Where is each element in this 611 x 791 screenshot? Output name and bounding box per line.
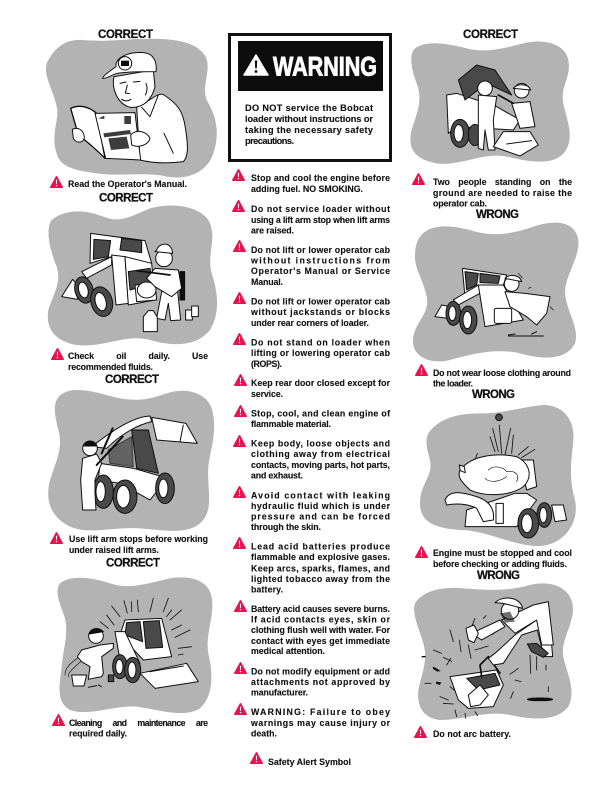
item: operator cab instructions: without instructions from (250, 256, 390, 266)
caption (69, 718, 208, 738)
caption: under raised lift arms. (69, 545, 159, 555)
item: battery acid: If acid contacts eyes, skin or (251, 614, 391, 624)
caption: operator cab. (433, 198, 487, 208)
illustration: overheated engine explosion (420, 405, 576, 546)
caption (433, 548, 572, 569)
icon: safety alert (51, 533, 62, 543)
caption: the loader. (433, 378, 473, 388)
warning text: DO NOT service the Bobcat (245, 103, 373, 113)
item: failure to obey (235, 704, 391, 738)
illustration: man checking oil in loader (48, 205, 217, 345)
item: jackstands: without jackstands or blocks (250, 307, 390, 317)
warning text: loader without instructions or (245, 114, 373, 124)
item: lead acid batteries: battery. (251, 584, 283, 594)
item: stop and cool: adding fuel. NO SMOKING. (251, 184, 363, 194)
item: flammable material (235, 406, 390, 429)
caption (68, 351, 208, 372)
item: rear door: service. (251, 389, 283, 399)
item: lead acid batteries: flammable and explosive gases. (251, 552, 390, 562)
panel: do not arc battery (414, 570, 573, 739)
heading: wrong: WRONG (477, 570, 520, 582)
item: battery acid: medical attention. (251, 646, 325, 656)
panel: lift arm stops (48, 374, 214, 555)
caption: Two people standing on the (433, 177, 572, 187)
heading: correct: CORRECT (99, 192, 153, 204)
item: jackstands: under rear corners of loader. (251, 318, 369, 328)
item: rear door (235, 375, 391, 399)
illustration: two people raising the cab (410, 41, 570, 164)
item: battery acid: Battery acid causes severe burns. (251, 604, 390, 614)
caption (433, 368, 571, 388)
safety list (233, 170, 391, 767)
caption: before checking or adding fluids. (433, 559, 567, 569)
heading: correct: CORRECT (463, 29, 518, 41)
caption: Use lift arm stops before working (69, 534, 208, 544)
caption: Do not arc battery. (433, 729, 511, 739)
item: stop and cool (233, 170, 390, 194)
illustration: man at lift arm stop (48, 390, 214, 531)
item: hydraulic fluid: through the skin. (251, 522, 321, 532)
caption: recommended fluids. (68, 362, 153, 372)
item: jackstands (234, 293, 391, 328)
icon: safety alert (413, 174, 424, 184)
illustration: man reading operator's manual (46, 39, 217, 177)
item: do not modify: attachments not approved by (251, 677, 390, 687)
heading: wrong: WRONG (476, 209, 519, 221)
item: stop and cool: Stop and cool the engine before (251, 173, 390, 183)
heading: wrong: WRONG (472, 389, 515, 401)
item: lead acid batteries: lighted tobacco away from the (251, 574, 390, 584)
panel: raising operator cab (410, 29, 572, 208)
item: do not modify: Do not modify equipment or add (251, 666, 390, 676)
item: battery acid: contact with eyes get immediate (251, 636, 390, 646)
caption: Engine must be stopped and cool (433, 548, 572, 558)
item: battery acid: clothing flush well with water. For (251, 625, 391, 635)
caption: required daily. (69, 728, 127, 738)
item: do not stand (234, 334, 391, 369)
item: hydraulic fluid: Avoid contact with leaking (251, 490, 390, 500)
caption (69, 534, 208, 555)
icon: safety alert (415, 727, 426, 737)
item: lift arm stop (233, 201, 390, 236)
item: hydraulic fluid (234, 487, 391, 532)
item: lift arm stop: Do not service loader without (251, 204, 390, 214)
item: keep body away (234, 436, 390, 480)
item: do not stand: lifting or lowering operator cab (251, 348, 391, 358)
icon: safety alert (52, 349, 63, 359)
item: do not stand: (ROPS). (251, 359, 282, 369)
item: operator cab instructions: Manual. (251, 277, 283, 287)
item: hydraulic fluid: hydraulic fluid which is under (251, 501, 391, 511)
caption: Check oil daily. Use (68, 351, 208, 361)
panel: check oil daily (48, 192, 217, 372)
warning banner (238, 41, 383, 91)
caption: Do not wear loose clothing around (433, 368, 571, 378)
item: hydraulic fluid: pressure and can be forced (251, 512, 390, 522)
legend: safety alert symbol: Safety Alert Symbol (268, 757, 351, 767)
banner word: WARNING (273, 52, 377, 82)
box frame (230, 34, 390, 160)
icon: safety alert (416, 547, 427, 557)
item: lead acid batteries: Lead acid batteries produce (251, 542, 390, 552)
item: keep body away: contacts, moving parts, hot parts, (251, 460, 390, 470)
item: lead acid batteries (234, 538, 390, 594)
icon: safety alert (53, 715, 64, 725)
illustration: clothing caught in loader (413, 223, 578, 361)
item: failure to obey: death. (251, 728, 277, 738)
heading: correct: CORRECT (106, 558, 160, 570)
item: flammable material: flammable material. (251, 419, 331, 429)
item: rear door: Keep rear door closed except for (251, 378, 391, 388)
item: lift arm stop: using a lift arm stop when lift arms (251, 215, 390, 225)
warning box (230, 34, 390, 160)
legend: safety alert symbol (251, 753, 351, 767)
item: operator cab instructions (234, 241, 391, 287)
illustration: battery explosion (414, 583, 573, 720)
item: do not stand: Do not stand on loader when (251, 338, 390, 348)
heading: correct: CORRECT (105, 374, 159, 386)
warning text: taking the necessary safety (245, 125, 374, 135)
icon: safety alert (51, 177, 62, 187)
item: do not modify (235, 663, 390, 698)
item: operator cab instructions: Do not lift or lower operator cab (251, 245, 391, 255)
item: keep body away: Keep body, loose objects and (251, 438, 390, 448)
item: battery acid (235, 601, 391, 656)
icon: safety alert (416, 365, 427, 375)
item: do not modify: manufacturer. (251, 688, 308, 698)
caption: Cleaning and maintenance are (69, 718, 208, 728)
caption: ground are needed to raise the (433, 188, 572, 198)
warning text: precautions. (245, 136, 294, 146)
item: lead acid batteries: Keep arcs, sparks, flames, and (251, 564, 390, 574)
warning text (245, 103, 374, 146)
item: jackstands: Do not lift or lower operator cab (251, 296, 391, 306)
panel: engine must be stopped (416, 389, 576, 569)
item: flammable material: Stop, cool, and clean engine of (251, 408, 390, 418)
item: operator cab instructions: Operator's Manual or Service (251, 266, 390, 276)
panel: loose clothing (413, 209, 578, 388)
item: keep body away: clothing away from electrical (251, 449, 390, 459)
item: keep body away: and exhaust. (251, 470, 303, 480)
item: failure to obey: WARNING: Failure to obey (251, 707, 390, 717)
illustration: man cleaning loader (58, 577, 212, 713)
item: lift arm stop: are raised. (251, 226, 294, 236)
panel: read the manual (46, 29, 217, 189)
icon: white warning triangle (244, 55, 268, 75)
item: failure to obey: warnings may cause injury or (250, 718, 391, 728)
caption (433, 177, 572, 208)
panel: cleaning and maintenance (53, 558, 212, 738)
caption: Read the Operator's Manual. (68, 179, 187, 189)
heading: correct: CORRECT (98, 29, 153, 41)
